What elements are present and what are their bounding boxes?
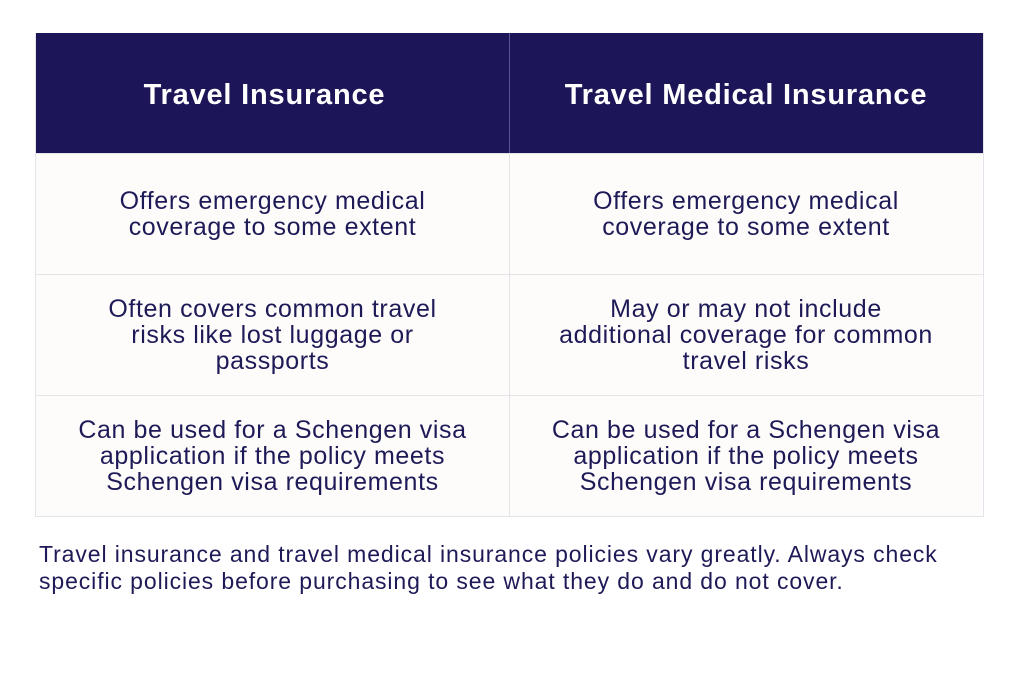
footnote: specific policies before purchasing to see what they do and do not cover. bbox=[39, 568, 844, 594]
row 3 bbox=[36, 396, 983, 517]
comparison table bbox=[35, 33, 984, 517]
row 2: Often covers common travel bbox=[108, 295, 437, 323]
header row: Travel Medical Insurance bbox=[565, 79, 927, 111]
footnote bbox=[39, 541, 938, 594]
row 2: May or may not include bbox=[610, 295, 882, 323]
row 2: passports bbox=[216, 347, 329, 375]
header row bbox=[36, 33, 983, 154]
row 1: coverage to some extent bbox=[602, 213, 890, 241]
row 1: coverage to some extent bbox=[129, 213, 416, 241]
row 3: Schengen visa requirements bbox=[580, 468, 912, 496]
footnote: Travel insurance and travel medical insurance policies vary greatly. Always check bbox=[39, 541, 938, 567]
header row: Travel Insurance bbox=[144, 79, 385, 111]
row 2 bbox=[36, 275, 983, 396]
row 1 bbox=[36, 154, 983, 275]
row 2: additional coverage for common bbox=[559, 321, 933, 349]
row 3: Can be used for a Schengen visa bbox=[552, 416, 940, 444]
row 3: Schengen visa requirements bbox=[106, 468, 439, 496]
row 1: Offers emergency medical bbox=[120, 187, 425, 215]
row 2: risks like lost luggage or bbox=[131, 321, 414, 349]
row 3: application if the policy meets bbox=[573, 442, 919, 470]
row 2: travel risks bbox=[683, 347, 809, 375]
row 3: Can be used for a Schengen visa bbox=[78, 416, 467, 444]
row 3: application if the policy meets bbox=[100, 442, 445, 470]
row 1: Offers emergency medical bbox=[593, 187, 899, 215]
